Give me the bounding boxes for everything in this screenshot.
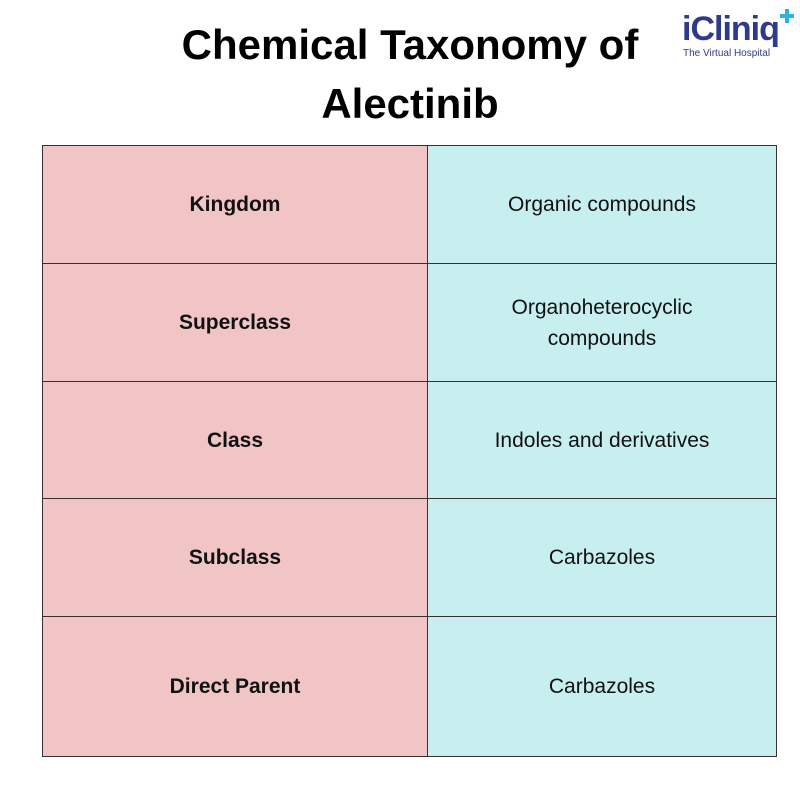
row: Superclass value: Organoheterocyclic xyxy=(512,296,692,318)
row: Subclass label xyxy=(42,498,428,617)
row: Kingdom label xyxy=(42,145,428,264)
row: Superclass value: compounds xyxy=(548,326,656,350)
row: Class label: Class xyxy=(207,428,263,452)
row: Direct Parent value: Carbazoles xyxy=(549,675,655,698)
row: Direct Parent label xyxy=(42,616,428,757)
row: Kingdom value xyxy=(427,145,777,264)
table: taxonomy xyxy=(42,145,777,757)
title: Alectinib xyxy=(321,80,499,127)
title: Chemical Taxonomy of xyxy=(182,21,638,68)
title xyxy=(182,21,638,127)
logo: iCliniq xyxy=(682,9,794,59)
row: Class value xyxy=(427,381,777,499)
row: Superclass value xyxy=(427,263,777,382)
row: Subclass label: Subclass xyxy=(189,546,281,569)
row: Superclass label: Superclass xyxy=(179,311,291,334)
logo: iCliniq: iCliniq xyxy=(682,10,779,48)
row: Class value: Indoles and derivatives xyxy=(495,428,709,452)
row: Superclass label xyxy=(42,263,428,382)
row: Subclass value xyxy=(427,498,777,617)
row: Kingdom value: Organic compounds xyxy=(508,193,696,216)
row: Direct Parent value xyxy=(427,616,777,757)
logo: iCliniq: The Virtual Hospital xyxy=(683,48,770,59)
row: Direct Parent label: Direct Parent xyxy=(170,675,300,698)
row: Kingdom label: Kingdom xyxy=(190,193,280,216)
row: Subclass value: Carbazoles xyxy=(549,546,655,569)
row: Class label xyxy=(42,381,428,499)
